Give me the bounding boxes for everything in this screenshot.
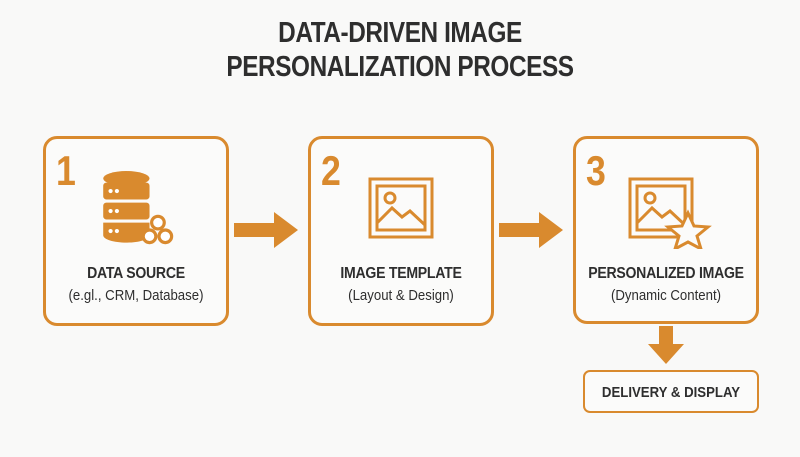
title [226, 17, 574, 83]
number 1: 1 [56, 147, 76, 194]
title: PERSONALIZATION PROCESS [226, 51, 574, 83]
icon: image with star [628, 178, 712, 249]
arrow down [648, 326, 684, 364]
icon: image [368, 178, 434, 238]
delivery box: DELIVERY & DISPLAY [602, 384, 740, 401]
title: DATA-DRIVEN IMAGE [278, 17, 522, 49]
delivery box [583, 370, 759, 413]
panel: personalized image: (Dynamic Content) [611, 287, 721, 304]
number 3: 3 [586, 147, 606, 194]
label: PERSONALIZED IMAGE [588, 265, 744, 282]
arrow 2 [499, 212, 563, 248]
panel: personalized image [573, 136, 759, 324]
label: DATA SOURCE [87, 265, 185, 282]
number 2: 2 [321, 147, 341, 194]
label: IMAGE TEMPLATE [340, 265, 462, 282]
icon: database [103, 171, 174, 244]
panel: image template [308, 136, 494, 326]
panel: image template: (Layout & Design) [348, 287, 454, 304]
panel: data source [43, 136, 229, 326]
panel: data source: (e.gl., CRM, Database) [69, 287, 203, 304]
arrow 1 [234, 212, 298, 248]
